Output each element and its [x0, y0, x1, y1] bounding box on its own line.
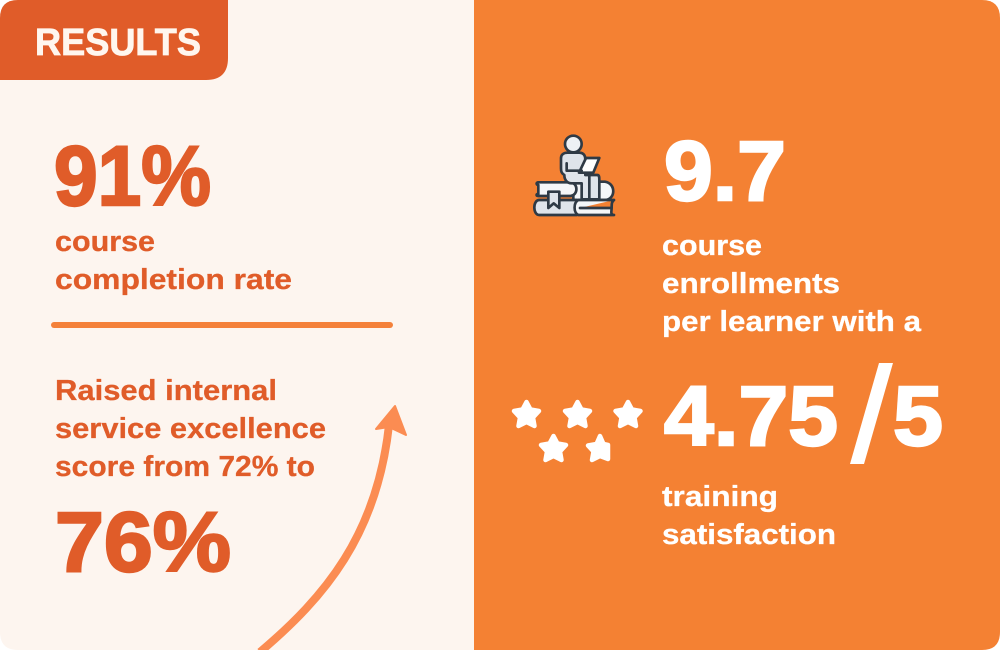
- stat: 4.75 out of 5 training satisfaction: 5: [893, 369, 943, 463]
- arrow: upward growth curve: [260, 406, 406, 650]
- panel: right orange background: [474, 0, 1000, 650]
- stat: 9.7 course enrollments: 9.7: [664, 124, 786, 218]
- stat: 91 percent course completion: completion rate: [55, 264, 292, 296]
- icon: rating stars: [514, 402, 640, 460]
- stat: 4.75 out of 5 training satisfaction: 4.75: [664, 369, 838, 463]
- stat: 91 percent course completion: 91%: [54, 129, 211, 223]
- stat: 4.75 out of 5 training satisfaction: training: [662, 481, 778, 513]
- stat: 9.7 course enrollments: [662, 124, 922, 338]
- heading tab: results: [0, 0, 228, 80]
- text block: service excellence score: [55, 375, 326, 483]
- stat: 9.7 course enrollments: course: [662, 230, 762, 262]
- stat: 4.75 out of 5 training satisfaction: [662, 363, 943, 551]
- panel: left results background: [0, 0, 474, 650]
- stat: 4.75 out of 5 training satisfaction: satisfaction: [662, 519, 836, 551]
- stat: 91 percent course completion: course: [55, 226, 155, 258]
- stat: 9.7 course enrollments: per learner with a: [662, 306, 922, 338]
- stat: 91 percent course completion: [54, 129, 292, 296]
- icon: person with laptop sitting on books: [534, 136, 614, 215]
- text block: service excellence score: score from 72% to: [55, 451, 315, 483]
- heading tab: results: RESULTS: [35, 22, 201, 64]
- text block: service excellence score: Raised internal: [55, 375, 277, 407]
- text block: service excellence score: service excellence: [55, 413, 326, 445]
- stat: 9.7 course enrollments: enrollments: [662, 268, 840, 300]
- stat: 76 percent: 76%: [55, 495, 231, 589]
